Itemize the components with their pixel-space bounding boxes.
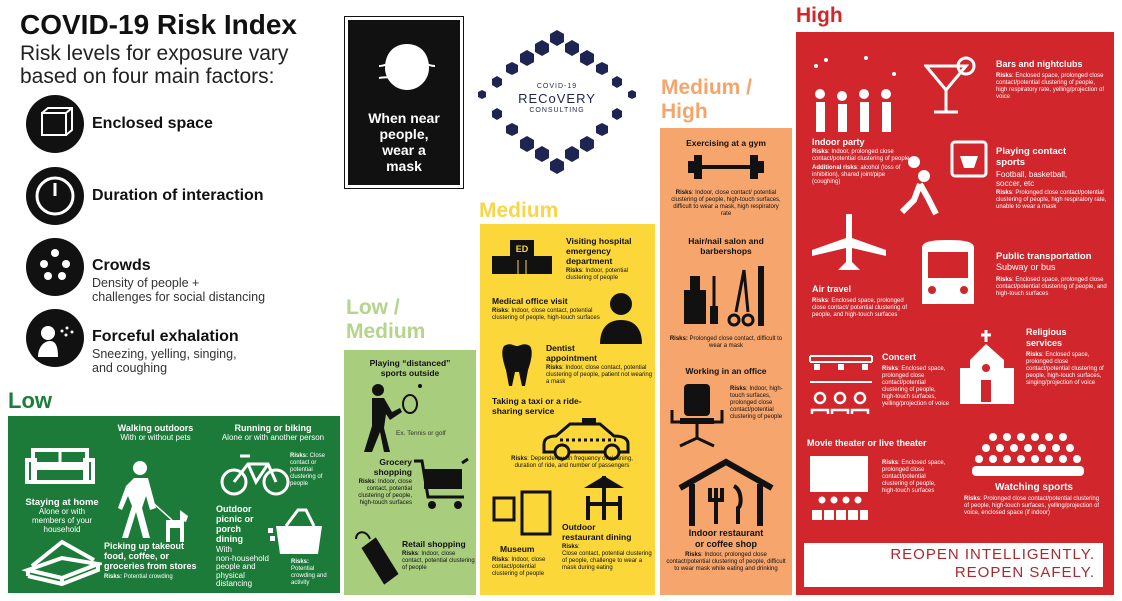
item: watching sports — [964, 482, 1104, 517]
item: outdoor picnic: physical — [216, 570, 245, 580]
icon: church — [958, 328, 1016, 406]
heading: medium/high — [661, 76, 752, 123]
item: salon — [660, 236, 792, 256]
item: indoor restaurant — [660, 528, 792, 550]
icon: office chair — [668, 382, 724, 452]
item: outdoor picnic: porch — [216, 524, 241, 534]
icon: dumbbell — [686, 152, 766, 182]
icon: basketball — [900, 140, 990, 220]
factor: duration: Duration of interaction — [92, 187, 264, 204]
item: salon: Hair/nail salon and — [688, 236, 764, 246]
icon: mask — [378, 44, 435, 90]
item: outdoor picnic: Outdoor — [216, 504, 252, 514]
panel: high — [796, 32, 1114, 595]
heading: high: High — [796, 4, 843, 27]
heading: low/medium: Low / — [346, 296, 400, 319]
item: taxi: Taking a taxi or a ride-sharing service — [492, 396, 582, 416]
icon: price tag — [355, 531, 398, 585]
item: outdoor picnic: distancing — [216, 579, 252, 588]
item: religious services: services — [1026, 338, 1062, 348]
callout: reopen — [804, 543, 1103, 587]
icon: outdoor table — [584, 476, 624, 520]
item: outdoor picnic: non-household — [216, 554, 269, 562]
factor: enclosed space: Enclosed space — [92, 115, 213, 132]
item: bars — [996, 59, 1108, 101]
item: contact sports: Football, basketball, — [996, 170, 1067, 179]
item: distanced sports: Playing “distanced” — [370, 358, 450, 368]
item: picking up takeout: groceries from stores — [104, 561, 197, 571]
item: dentist: Dentist — [546, 343, 575, 353]
item: air travel: Risks: Enclosed space, prolonged close contact/ potential clustering of people, and high-touch surfaces — [812, 298, 907, 318]
item: outdoor picnic: With — [216, 545, 232, 554]
item: picking up takeout — [104, 541, 197, 580]
factor: crowds — [26, 238, 265, 304]
item: hospital ED: Visiting hospital — [566, 236, 632, 246]
panel: medium/high: Risks: Indoor, close contact/ potential clustering of people, high-touch surfaces, difficult to wear a mask, high respiratory rate — [671, 190, 781, 217]
icon: airplane — [810, 210, 890, 274]
item: grocery shopping: Risks: Indoor, close contact, potential clustering of people, high-touch surfaces — [358, 479, 412, 506]
item: outdoor dining — [562, 522, 652, 571]
item: contact sports — [996, 146, 1108, 211]
icon: sneeze — [26, 309, 84, 367]
item: staying at home: Alone or with — [39, 507, 85, 516]
icon: pizza box — [22, 540, 102, 586]
item: grocery shopping: Grocery — [379, 457, 412, 467]
item: walking outdoors: Walking outdoors — [118, 423, 193, 433]
panel: low: Risks: Close contact or potential clustering of people — [290, 453, 325, 487]
icon: tennis player — [364, 384, 422, 452]
icon: ED building: ED — [516, 244, 529, 254]
item: dentist — [546, 343, 652, 385]
panel: medium/high: Risks: Prolonged close contact, difficult to wear a mask — [670, 336, 782, 349]
item: concert: Risks: Enclosed space, prolonged close contact/potential clustering of people, high-touch surfaces, yelling/projection of voice — [882, 366, 949, 407]
item: museum: Museum — [500, 544, 534, 554]
item: bars: Risks: Enclosed space, prolonged close contact/potential clustering of people, high respiratory rate, yelling/projection of voice — [996, 73, 1104, 100]
item: public transport: Public transportation — [996, 251, 1092, 262]
icon: cart — [414, 458, 469, 509]
item: public transport: Risks: Enclosed space, prolonged close contact/potential clustering of people, and high-touch surfaces — [996, 277, 1107, 297]
icon: stadium crowd — [966, 432, 1090, 478]
subtitle: Risk levels for exposure vary — [20, 42, 288, 65]
heading: low/medium: Medium — [346, 320, 425, 343]
panel: high: Risks: Enclosed space, prolonged close contact/potential clustering of people, high-touch surfaces — [882, 460, 945, 494]
icon: theater — [810, 454, 870, 522]
panel: low: Potential crowding and activity — [291, 566, 327, 586]
icon: basket — [268, 508, 322, 554]
icon: bus — [918, 238, 978, 310]
item: contact sports: sports — [996, 157, 1025, 168]
icon: doctor — [600, 293, 642, 344]
icon: crowd — [26, 238, 84, 296]
item: public transport — [996, 251, 1110, 298]
icon: salon tools — [682, 264, 772, 334]
item: outdoor dining: Outdoor — [562, 522, 596, 532]
logo — [478, 30, 636, 174]
item: contact sports: Playing contact — [996, 146, 1066, 157]
heading: low/medium — [346, 296, 425, 343]
panel: low/medium — [344, 350, 476, 595]
item: hospital ED — [566, 236, 632, 281]
item: watching sports: Risks: Prolonged close contact/potential clustering of people, high-touch surfaces, yelling/projection of voice, enclosed space (if indoor) — [964, 496, 1099, 516]
panel: low/medium: Ex. Tennis or golf — [396, 430, 446, 437]
item: contact sports: Risks: Prolonged close contact/potential clustering of people, high respiratory rate, unable to wear a mask — [996, 190, 1106, 210]
item: medical office: Medical office visit — [492, 296, 568, 306]
item: indoor restaurant: Indoor restaurant — [689, 528, 763, 538]
item: religious services — [1026, 327, 1110, 387]
item: air travel: Air travel — [812, 284, 851, 294]
item: picking up takeout: food, coffee, or — [104, 551, 169, 561]
heading: medium: Medium — [479, 199, 558, 222]
factor: forceful exhalation: Sneezing, yelling, singing, — [92, 347, 237, 361]
factor: forceful exhalation: and coughing — [92, 361, 167, 375]
icon: enclosed space — [26, 95, 84, 153]
item: picking up takeout: Picking up takeout — [104, 541, 184, 551]
icon: tooth — [502, 344, 532, 386]
item: dentist: appointment — [546, 353, 597, 363]
item: outdoor dining: restaurant dining — [562, 532, 631, 542]
logo: COVID-19 — [537, 83, 577, 90]
item: running or biking — [222, 423, 324, 442]
item: dentist: Risks: Indoor, close contact, potential clustering of people, patient not wearing a mask — [546, 365, 652, 385]
item: staying at home — [25, 497, 99, 534]
factor: forceful exhalation — [26, 309, 239, 375]
icon: walker with dog — [118, 461, 188, 542]
mask callout: people, — [379, 126, 428, 142]
item: contact sports: soccer, etc — [996, 179, 1034, 188]
item: outdoor dining: Risks: — [562, 544, 580, 550]
item: outdoor picnic — [216, 504, 269, 588]
item: hospital ED: emergency — [566, 246, 611, 256]
item: distanced sports — [370, 358, 450, 378]
item: retail shopping: Retail shopping — [402, 539, 466, 549]
icon: sofa — [25, 448, 95, 484]
item: museum: Risks: Indoor, close contact/potential clustering of people — [492, 557, 545, 577]
item: hospital ED: Risks: Indoor, potential clustering of people — [566, 268, 628, 281]
item: retail shopping — [402, 539, 475, 571]
item: bars: Bars and nightclubs — [996, 59, 1083, 69]
item: retail shopping: Risks: Indoor, close contact, potential clustering of people — [402, 551, 475, 571]
icon: clock — [26, 167, 84, 225]
mask callout: mask — [386, 158, 422, 174]
item: outdoor dining: Close contact, potential clustering of people, challenge to wear a mask during eating — [562, 551, 652, 571]
item: indoor party: Risks: Indoor, prolonged close contact/potential clustering of people — [812, 149, 909, 162]
item: outdoor picnic: dining — [216, 534, 243, 544]
icon: ED building — [492, 240, 552, 274]
item: medical office — [492, 296, 600, 321]
factor: enclosed space — [26, 95, 213, 153]
item: walking outdoors: With or without pets — [120, 433, 191, 442]
mask callout — [345, 17, 463, 188]
factor: forceful exhalation: Forceful exhalation — [92, 328, 239, 345]
item: staying at home: members of your — [32, 516, 92, 525]
factor: crowds: Density of people + — [92, 276, 199, 290]
panel: medium/high: Risks: Indoor, high-touch surfaces, prolonged close contact/potential clustering of people — [730, 386, 783, 420]
item: religious services: Risks: Enclosed space, prolonged close contact/potential clustering of people, high-touch surfaces, singing/projection of voice — [1026, 352, 1104, 386]
callout: reopen: REOPEN INTELLIGENTLY. — [890, 546, 1095, 563]
item: staying at home: household — [44, 525, 80, 534]
item: concert: Concert — [882, 352, 916, 362]
icon: party people — [806, 44, 906, 134]
item: salon: barbershops — [700, 246, 752, 256]
panel: medium/high: Risks: Indoor, prolonged close contact/potential clustering of people, difficult to wear mask while eating and drinking — [666, 552, 786, 572]
item: air travel — [812, 284, 912, 319]
item: movie theater: Movie theater or live theater — [807, 438, 927, 448]
subtitle — [20, 42, 288, 88]
icon: museum frames — [492, 490, 552, 536]
item: indoor party: Additional risks: alcohol (loss of inhibition), shared joint/pipe (coughing) — [812, 165, 900, 185]
item: running or biking: Alone or with another person — [222, 433, 324, 442]
item: grocery shopping — [358, 457, 412, 506]
panel: low: Risks: — [291, 559, 309, 565]
factor: crowds: challenges for social distancing — [92, 290, 265, 304]
item: running or biking: Running or biking — [234, 423, 312, 433]
subtitle: based on four main factors: — [20, 65, 274, 88]
mask callout: When near — [368, 110, 440, 126]
factor: duration — [26, 167, 264, 225]
item: walking outdoors — [118, 423, 193, 442]
item: office: Working in an office — [685, 366, 767, 376]
panel: low — [8, 416, 340, 593]
item: grocery shopping: shopping — [374, 467, 412, 477]
title: COVID-19 Risk Index — [20, 9, 297, 40]
mask callout: wear a — [382, 142, 426, 158]
item: indoor party — [812, 137, 912, 186]
factor: crowds: Crowds — [92, 257, 151, 274]
panel: medium — [480, 224, 655, 595]
icon: bicycle — [220, 454, 290, 496]
panel: medium/high — [660, 128, 792, 595]
heading: medium/high: High — [661, 100, 708, 123]
item: gym: Exercising at a gym — [686, 138, 766, 148]
callout: reopen: REOPEN SAFELY. — [955, 564, 1095, 581]
item: staying at home: Staying at home — [25, 497, 99, 508]
logo: CONSULTING — [529, 107, 585, 114]
icon: restaurant house — [676, 458, 776, 528]
item: museum — [492, 544, 546, 577]
item: medical office: Risks: Indoor, close contact, potential clustering of people, high-touch surfaces — [492, 308, 600, 321]
item: picking up takeout: Risks: Potential crowding — [104, 574, 173, 580]
icon: cocktail — [924, 52, 986, 118]
icon: taxi — [542, 418, 630, 460]
item: watching sports: Watching sports — [995, 482, 1073, 493]
panel: medium: Risks: Dependency on frequency of cleaning, duration of ride, and number of passengers — [511, 456, 633, 469]
item: hospital ED: department — [566, 256, 612, 266]
item: outdoor picnic: people and — [216, 562, 256, 571]
heading: medium/high: Medium / — [661, 76, 752, 99]
item: indoor party: Indoor party — [812, 137, 865, 147]
item: public transport: Subway or bus — [996, 262, 1056, 272]
item: indoor restaurant: or coffee shop — [695, 539, 757, 549]
item: outdoor picnic: picnic or — [216, 514, 254, 524]
item: religious services: Religious — [1026, 327, 1067, 337]
logo: RECoVERY — [518, 91, 596, 106]
icon: concert — [808, 352, 874, 418]
item: distanced sports: sports outside — [381, 368, 439, 378]
heading: Low: Low — [8, 388, 52, 413]
